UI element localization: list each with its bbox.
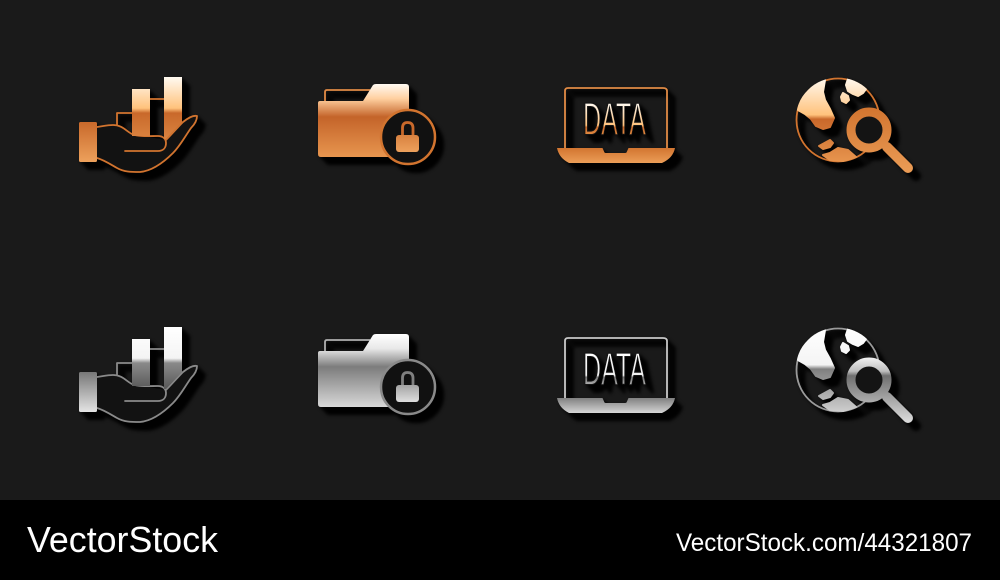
icon: silver laptop with DATA [557,338,675,413]
folder body [318,334,409,407]
laptop base [557,148,675,163]
continents [798,329,866,411]
icon: gold laptop with DATA [557,88,675,163]
icon: silver globe with magnifier [796,328,908,418]
palm interior [97,366,197,422]
globe outline [796,78,880,162]
continents [798,79,866,161]
image id: VectorStock.com/44321807 [676,529,972,557]
tall bar [164,77,182,139]
middle bar [132,339,150,386]
DATA label: DATA [583,94,646,144]
magnifier [851,362,908,418]
padlock [396,372,419,402]
laptop screen [565,88,667,148]
wrist cuff [79,122,97,162]
globe outline [796,328,880,412]
middle bar [132,89,150,136]
icon: gold hand holding bar chart [79,77,197,172]
icon: silver hand holding bar chart [79,327,197,422]
DATA label: DATA [583,344,646,394]
lock badge [381,360,435,414]
folder body [318,84,409,157]
icon: gold locked folder [318,84,435,164]
folder back tab [325,90,370,101]
palm interior [97,116,197,172]
tall bar [164,327,182,389]
hand outline [97,99,197,172]
laptop base [557,398,675,413]
icon: gold globe with magnifier [796,78,908,168]
lock badge [381,110,435,164]
icon: silver locked folder [318,334,435,414]
laptop screen [565,338,667,398]
hand outline [97,349,197,422]
magnifier [851,112,908,168]
brand name: VectorStock [27,519,219,560]
padlock [396,122,419,152]
footer band [0,500,1000,580]
folder back tab [325,340,370,351]
wrist cuff [79,372,97,412]
